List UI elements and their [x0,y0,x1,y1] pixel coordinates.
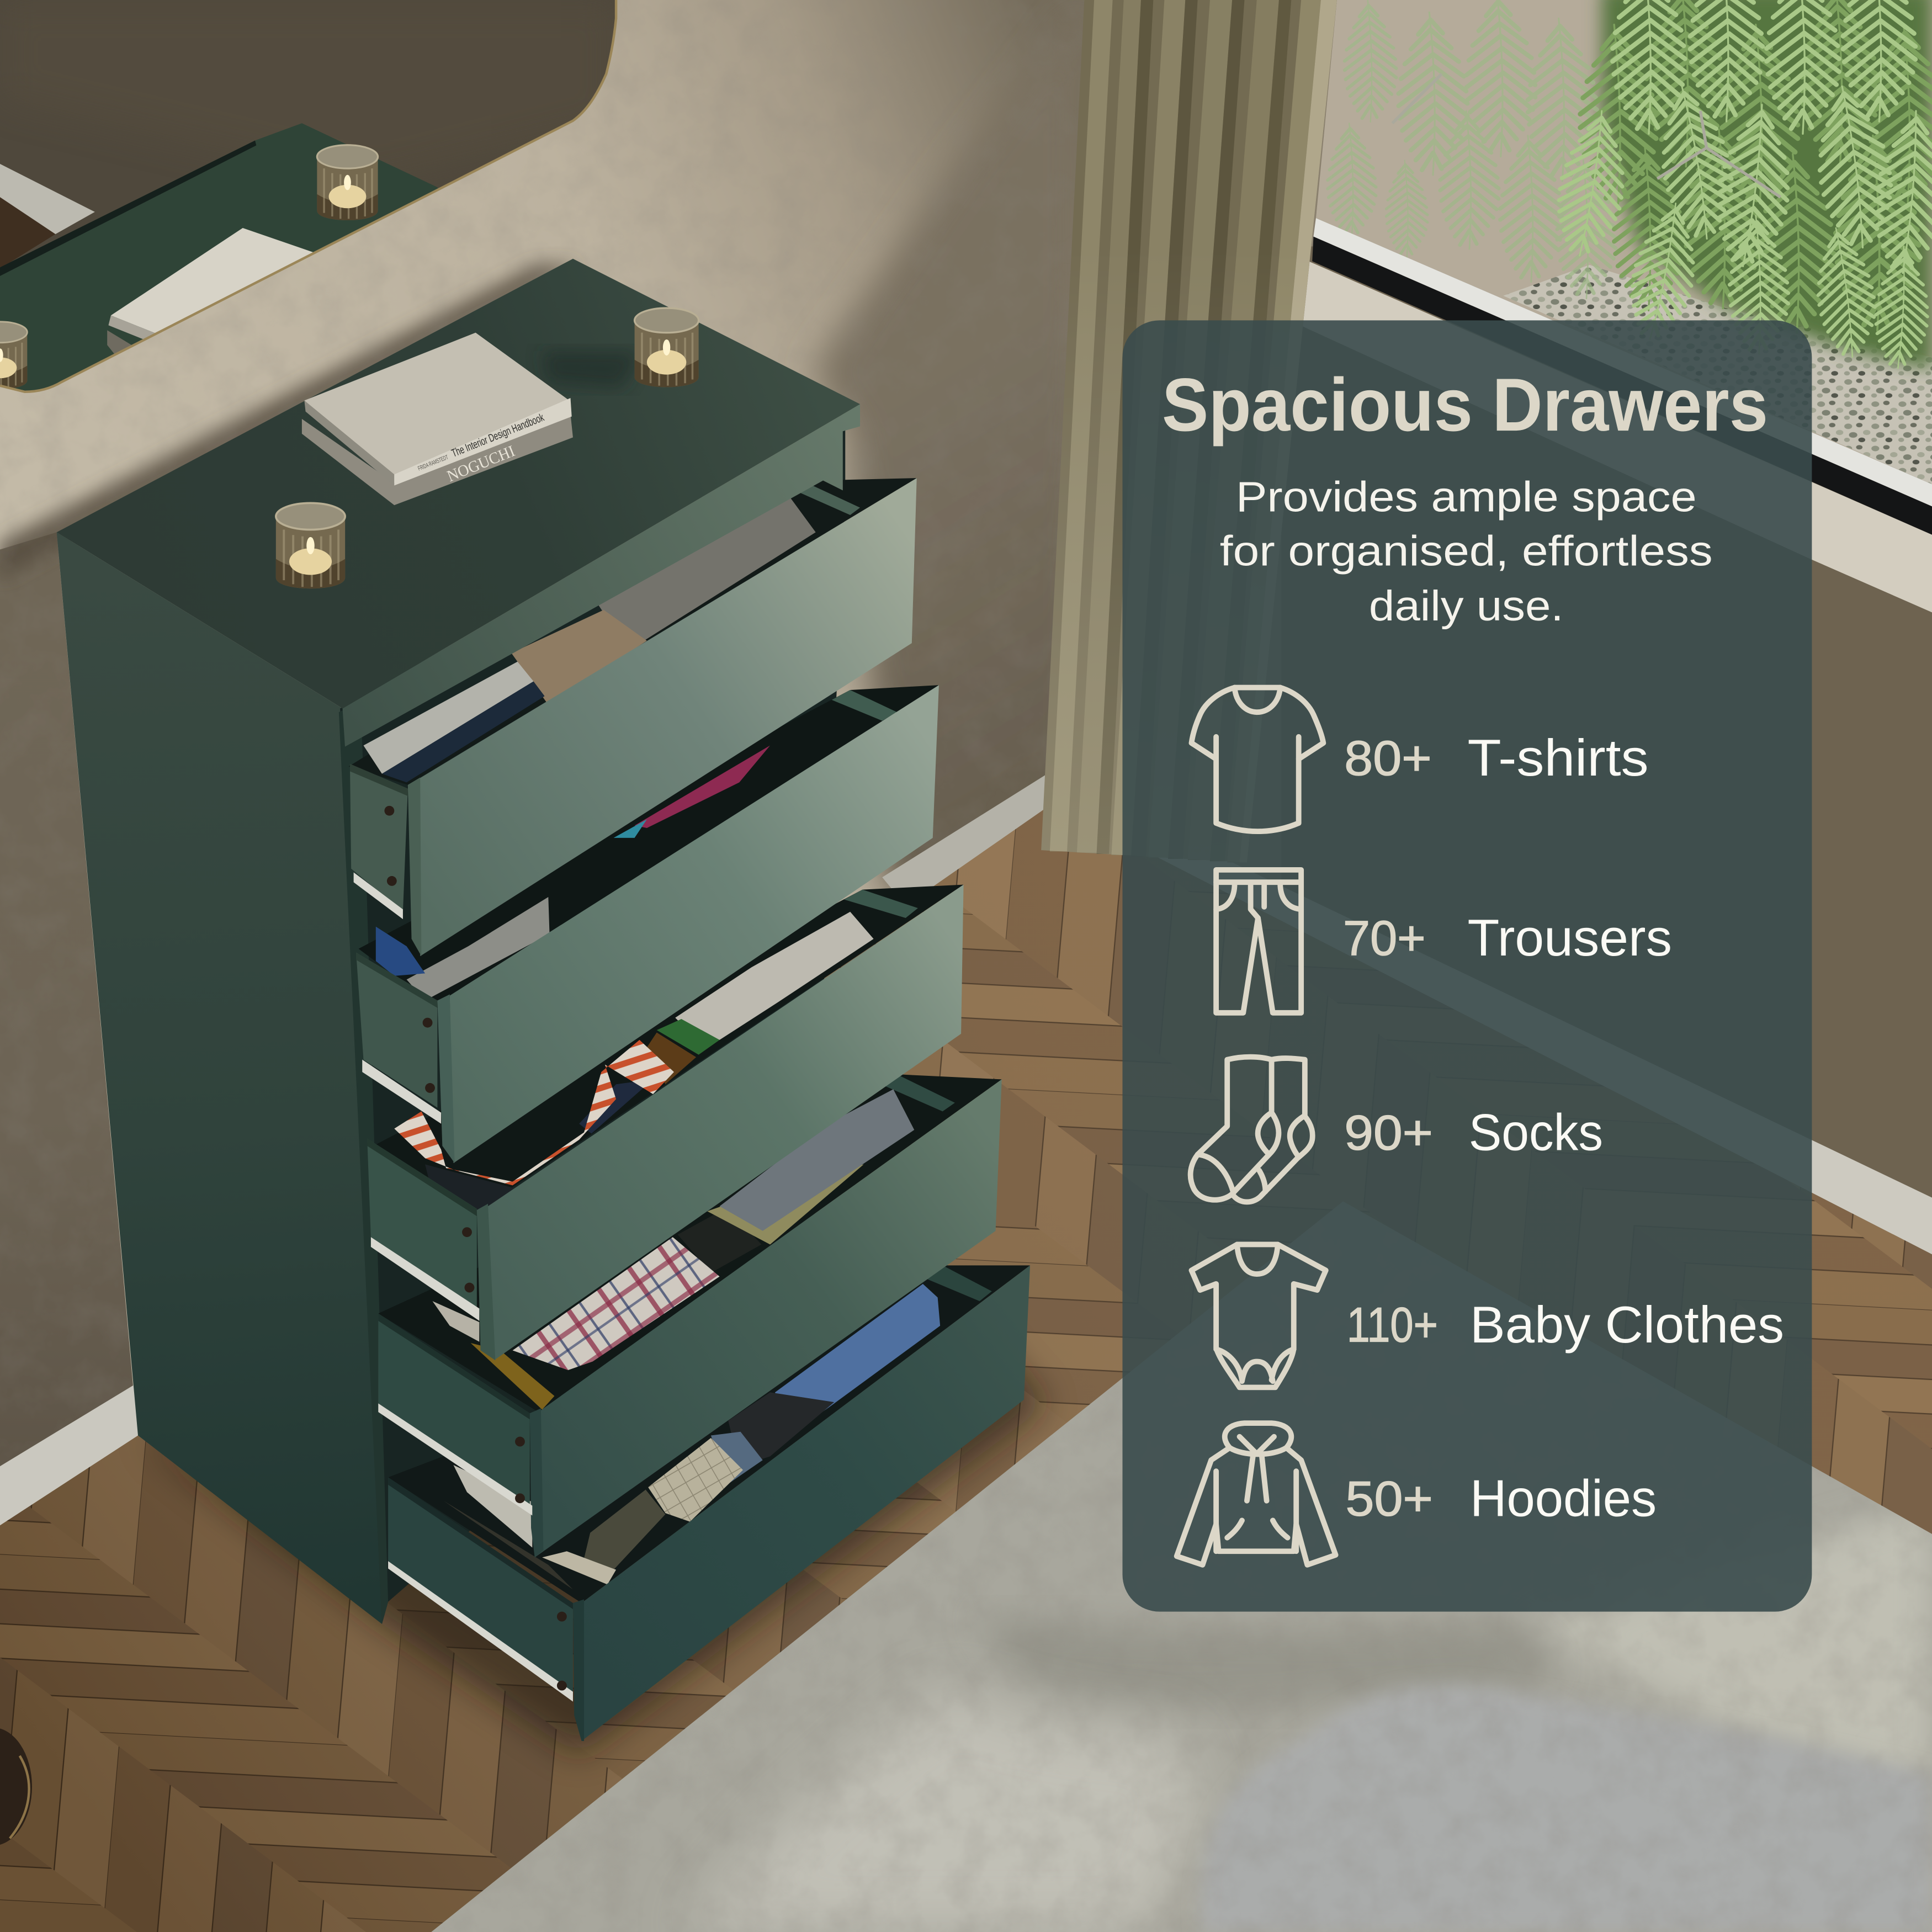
row: hoodies: 50+ [1346,1471,1433,1526]
row: baby clothes: 110+ [1347,1297,1438,1352]
drawer 4 [378,1074,1002,1557]
books: The Interior Design Handbook [450,411,546,460]
mirror floor [0,195,55,269]
drawer 5 clothes [775,1284,940,1435]
center baseboard [882,774,1047,906]
description: Provides ample space [1236,473,1697,521]
mirror chest reflection [0,123,444,392]
row: t-shirts [1191,688,1649,831]
books [302,333,573,505]
drawer 1 rail [354,872,403,919]
drawer 3 [367,885,964,1360]
icon: trousers [1216,870,1301,1013]
row: t-shirts: T-shirts [1467,729,1649,787]
drawer 3 front edge [477,1204,495,1360]
chest of drawers [57,259,1030,1741]
chest top surface [57,259,860,708]
icon: baby bodysuit [1191,1244,1326,1387]
candles [276,308,699,588]
row: t-shirts: 80+ [1344,730,1432,785]
curtain [1041,0,1337,862]
drawer 2 rail [362,1060,441,1124]
drawer 5 [388,1265,1030,1741]
chest top strip [343,404,860,747]
chest left side panel [57,532,382,1624]
drawer 3 rail [371,1237,479,1321]
info panel [1122,320,1812,1612]
drawer 2 [356,685,939,1163]
gravel [1503,265,1932,484]
floor shadow under chest [138,1306,1047,1756]
drawer 3 clothes [675,912,874,1040]
chest shadow on wall [0,265,579,579]
wall shadow left of chest [0,532,138,1528]
bare branches [1392,74,1780,197]
drawer 1 clothes [598,495,816,651]
icon: hoodie [1177,1423,1336,1565]
drawer 1 front edge [408,777,421,956]
description: for organised, effortless [1220,528,1713,575]
mirror candles [317,145,378,220]
heading: Spacious Drawers [1162,363,1768,447]
book shadow [542,351,641,388]
row: hoodies: Hoodies [1470,1469,1657,1527]
drawer 2 front edge [437,994,455,1163]
row: baby clothes: Baby Clothes [1470,1296,1784,1354]
icon: socks [1191,1057,1313,1202]
books: NOGUCHI [444,442,517,485]
window frame [1312,237,1932,535]
wall shadow right of chest [813,0,1084,906]
right baseboard [1047,774,1932,1254]
drawer 4 front edge [530,1408,543,1557]
row: trousers [1216,870,1672,1013]
row: socks [1191,1057,1603,1202]
row: socks: Socks [1469,1103,1603,1161]
drawer 4 clothes [678,1208,761,1273]
drawer 5 rail [388,1561,573,1702]
background wall [0,0,1084,1528]
upper book [304,333,569,483]
mirror book reflection [111,228,314,335]
window view [1316,0,1932,493]
window trim [1313,218,1932,506]
row: socks: 90+ [1344,1105,1433,1160]
description [1220,473,1713,630]
wall mirror [0,0,616,394]
chest front opening [340,419,845,1624]
drawer 5 front edge [573,1599,584,1741]
drawer 4 rail [378,1403,532,1516]
drawer 2 clothes [407,897,550,1000]
mirror baseboard [0,164,95,234]
left baseboard [0,1382,138,1525]
row: trousers: Trousers [1467,909,1672,967]
icon: t-shirt [1191,688,1323,831]
row: hoodies [1177,1423,1657,1565]
lower book [302,414,573,505]
lamp base [0,1727,32,1846]
row: baby clothes [1191,1244,1784,1387]
window sill [1297,261,1932,612]
window wall [1210,0,1932,1254]
drawer 1 [349,478,917,956]
description: daily use. [1369,582,1564,630]
row: trousers: 70+ [1343,910,1426,965]
spine text: FRIDA RAMSTEDT [417,454,449,472]
rug [431,1201,1932,1932]
